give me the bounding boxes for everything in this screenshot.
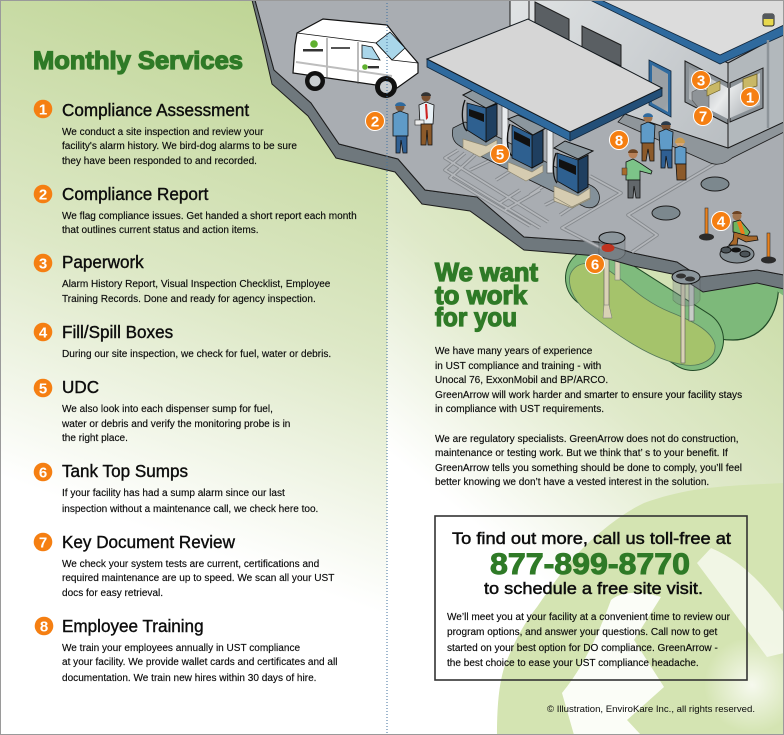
service 1: Compliance Assessment: 1	[39, 102, 47, 118]
text block: regulatory specialists	[435, 434, 742, 488]
callout 6	[586, 254, 604, 274]
icon: roof beacon	[763, 14, 774, 26]
icon: alarm panel	[743, 74, 757, 90]
watermark: GreenArrow circular arrow logo	[497, 483, 784, 735]
service 2: Compliance Report: We flag compliance issues. Get handed a short report each month	[62, 211, 357, 222]
service 8: Employee Training: We train your employees annually in UST compliance	[62, 643, 300, 654]
side face	[252, 0, 784, 292]
service 5: UDC: 5	[39, 380, 47, 398]
callout 3	[692, 70, 710, 90]
illustration: training group	[622, 113, 686, 198]
text block: experience	[435, 346, 742, 415]
call-to-action box	[435, 516, 747, 680]
callout 1: 1	[746, 90, 754, 106]
service 4: Fill/Spill Boxes: 4	[39, 324, 48, 342]
heading: We want to work for you: We want	[435, 257, 538, 287]
callout 7	[694, 106, 712, 126]
service 2: Compliance Report	[34, 185, 357, 236]
service 5: UDC: UDC	[62, 378, 99, 397]
callout 5: 5	[496, 146, 504, 164]
heading: We want to work for you	[435, 257, 538, 332]
icon: file cabinet and paperwork	[692, 88, 709, 111]
callout 8	[610, 130, 628, 150]
dispenser 1	[462, 90, 497, 157]
service 4: Fill/Spill Boxes	[34, 323, 331, 360]
callout 8: 8	[615, 132, 623, 150]
dispenser 3	[553, 141, 593, 208]
fold line	[386, 0, 388, 735]
illustration: building	[510, 0, 784, 164]
back tank	[690, 270, 779, 340]
copyright note: © Illustration, EnviroKare Inc., all rights reserved.	[547, 704, 755, 714]
service 1: Compliance Assessment	[34, 100, 297, 167]
illustration: underground piping	[445, 133, 767, 252]
service 5: UDC: We also look into each dispenser sump for fuel,	[62, 404, 273, 415]
service 5: UDC	[34, 378, 290, 444]
illustration: paved lot	[252, 0, 784, 292]
probes	[604, 250, 609, 316]
service list	[34, 100, 357, 684]
callouts on illustration	[366, 70, 760, 274]
service 2: Compliance Report: Compliance Report	[62, 185, 209, 204]
service 7: Key Document Review: required maintenance are up to speed. We scan all your UST	[62, 573, 334, 584]
service 1: Compliance Assessment: We conduct a site inspection and review your	[62, 127, 264, 138]
service 7: Key Document Review: Key Document Review	[62, 533, 236, 552]
text block: experience: We have many years of experience	[435, 346, 593, 357]
illustration: tank top sumps	[599, 232, 700, 306]
heading: We want to work for you: to work	[435, 280, 528, 310]
box body text	[447, 612, 731, 669]
illustration: canopy	[427, 19, 662, 141]
illustration: kneeling inspector and bollards	[699, 208, 776, 264]
service 3: Paperwork: 3	[39, 256, 47, 272]
background: left panel gradient	[0, 0, 387, 735]
service 2: Compliance Report: 2	[39, 186, 47, 204]
callout 3: 3	[697, 72, 705, 90]
service 7: Key Document Review: docs for easy retrieval.	[62, 588, 163, 599]
service 3: Paperwork: Alarm History Report, Visual Inspection Checklist, Employee	[62, 279, 331, 290]
service 8: Employee Training	[35, 617, 337, 684]
callout 7: 7	[699, 108, 707, 126]
heading: We want to work for you: for you	[435, 302, 517, 332]
service 1: Compliance Assessment: Compliance Assessment	[62, 101, 249, 120]
illustration: underground tanks	[570, 250, 784, 365]
service 1: Compliance Assessment: they have been responded to and recorded.	[62, 156, 257, 167]
service 1: Compliance Assessment: facility's alarm history. We bird-dog alarms to be sure	[62, 141, 297, 152]
text block: experience: in compliance with UST requirements.	[435, 404, 604, 415]
box body text: We’ll meet you at your facility at a convenient time to review our	[447, 612, 731, 623]
illustration: dispensers	[462, 90, 593, 208]
front tank	[570, 263, 715, 365]
illustration: service van	[293, 19, 418, 98]
service 7: Key Document Review: 7	[39, 534, 47, 552]
service 4: Fill/Spill Boxes: Fill/Spill Boxes	[62, 323, 173, 342]
text block: regulatory specialists: maintenance or testing work. But we think that’ s to your benefit. If	[435, 448, 728, 459]
service 6: Tank Top Sumps: Tank Top Sumps	[62, 462, 188, 481]
service 2: Compliance Report: that outlines current status and action items.	[62, 225, 259, 236]
illustration: pump island base	[452, 122, 599, 208]
title: Monthly Services: Monthly Services	[33, 47, 243, 75]
service 6: Tank Top Sumps: 6	[39, 464, 47, 482]
service 5: UDC: water or debris and verify the monitoring probe is in	[61, 419, 290, 430]
box body text: started on your best option for DO compliance. GreenArrow -	[447, 643, 718, 654]
phone number: 877-899-8770	[490, 548, 690, 581]
callout 1	[740, 88, 760, 106]
top surface	[255, 0, 784, 277]
service 7: Key Document Review	[34, 533, 334, 599]
callout 4	[712, 212, 730, 230]
callout 2: 2	[371, 114, 379, 130]
service 5: UDC: the right place.	[62, 433, 128, 444]
text block: regulatory specialists: better knowing we don’t have a vested interest in the solution.	[435, 477, 709, 488]
service 8: Employee Training: Employee Training	[62, 617, 204, 636]
icon: manholes	[652, 177, 754, 263]
text block: experience: GreenArrow will work harder and smarter to ensure your facility stays	[435, 390, 742, 401]
callout 2	[366, 112, 384, 130]
service 8: Employee Training: at your facility. We provide wallet cards and certificates and all	[62, 657, 337, 668]
service 6: Tank Top Sumps: inspection without a maintenance call, we check here too.	[62, 504, 318, 515]
heading: call us: To find out more, call us toll-free at	[452, 529, 731, 548]
dispenser 2	[507, 115, 546, 181]
illustration: columns	[502, 100, 553, 173]
callout 5	[490, 144, 510, 164]
service 4: Fill/Spill Boxes: During our site inspection, we check for fuel, water or debris.	[62, 349, 331, 360]
text block: regulatory specialists: GreenArrow tells you something should be done to comply, you’ll feel	[435, 463, 742, 474]
box body text: program options, and answer your questions. Call now to get	[447, 627, 718, 638]
illustration: inspector and manager, callout 2	[393, 92, 434, 153]
service 3: Paperwork: Paperwork	[62, 253, 144, 272]
subheading: schedule visit: to schedule a free site visit.	[484, 579, 703, 598]
service 6: Tank Top Sumps: If your facility has had a sump alarm since our last	[62, 488, 285, 499]
service 3: Paperwork	[34, 253, 331, 305]
service 7: Key Document Review: We check your system tests are current, certifications and	[62, 559, 319, 570]
text block: regulatory specialists: We are regulatory specialists. GreenArrow does not do construction,	[435, 434, 739, 445]
text block: experience: Unocal 76, ExxonMobil and BP/ARCO.	[435, 375, 608, 386]
service 8: Employee Training: documentation. We train new hires within 30 days of hire.	[62, 673, 316, 684]
background: right panel gradient	[387, 0, 784, 735]
box body text: the best choice to ease your UST compliance headache.	[447, 658, 699, 669]
service 8: Employee Training: 8	[40, 618, 48, 636]
callout 4: 4	[717, 214, 726, 230]
text block: experience: in UST compliance and training - with	[435, 361, 601, 372]
service 6: Tank Top Sumps	[34, 462, 318, 515]
callout 6: 6	[591, 256, 599, 274]
service 3: Paperwork: Training Records. Done and ready for agency inspection.	[62, 294, 316, 305]
